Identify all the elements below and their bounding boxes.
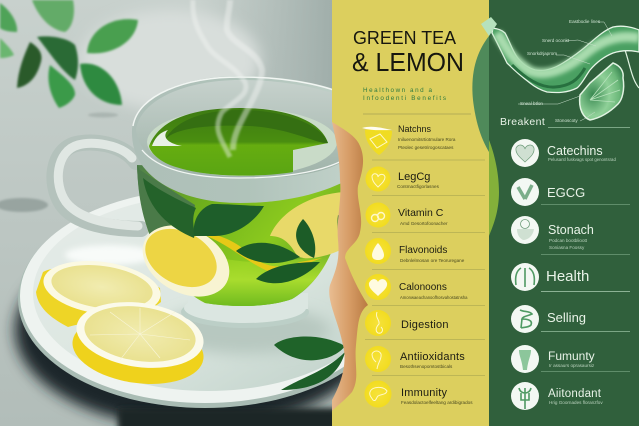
table dark corner	[118, 408, 350, 426]
benefit: Aiitondant: Hrig Goornades floranzfov	[549, 400, 603, 405]
benefit: Antiioxidants: Besothsenopomtostbicals	[400, 364, 453, 369]
benefit: Antiioxidants: Antiioxidants	[400, 351, 465, 363]
benefit: Vitamin C	[366, 202, 448, 228]
icon: heart circle	[366, 166, 390, 192]
benefit: LegCg	[366, 166, 440, 192]
steam	[193, 0, 262, 157]
leader lines	[518, 22, 612, 121]
label: Stonoscoty	[555, 118, 578, 123]
subtitle: Healthown and a	[363, 87, 432, 94]
benefit: EGCG: EGCG	[547, 185, 585, 200]
benefit: Catechins: Pelusantl fuskvags spot genontsrad	[548, 157, 616, 162]
cup foot	[181, 300, 309, 323]
benefit: Fumunty: Ir assaurs oprasaursiz	[549, 363, 595, 368]
icon: drop circle	[365, 238, 391, 264]
benefit: Aiitondant: Aiitondant	[548, 388, 602, 400]
decorative tan wavy ribbon	[329, 122, 368, 411]
saucer	[18, 196, 345, 408]
lemon in cup	[142, 226, 230, 297]
saucer leaves	[274, 336, 345, 390]
heading: Breakent: Breakent	[500, 116, 545, 128]
benefit: EGCG	[511, 178, 630, 206]
title: & LEMON	[352, 47, 464, 77]
cup rim	[132, 76, 362, 203]
icon: intestine	[511, 305, 539, 333]
icon: trachea	[511, 382, 539, 410]
tea surface	[147, 108, 337, 176]
lemon slice front	[72, 302, 204, 384]
decorative wave: light green	[489, 140, 499, 236]
benefit: Health	[511, 263, 630, 292]
lemon slice back	[36, 261, 161, 327]
benefit: Flavonoids: Flavonoids	[399, 245, 447, 256]
photo: green tea cup on saucer	[0, 0, 345, 426]
leaf right upper	[296, 219, 315, 258]
benefit: LegCg: LegCg	[398, 171, 430, 183]
icon: digestion circle	[365, 310, 391, 336]
benefit: Vitamin C: Amd Gesortofoonacher	[400, 221, 448, 226]
benefit: Catechins: Catechins	[547, 144, 603, 158]
benefit: Natchns: Pteolec gesetrirogoscataes	[398, 145, 454, 150]
stomach pouch	[580, 63, 624, 120]
benefit: Natchns: Iniluenomitsrtiotmulare Rora	[398, 137, 456, 142]
lemon right	[270, 192, 345, 258]
benefit: Natchns	[362, 124, 456, 155]
leaf right lower	[236, 243, 300, 263]
benefit: Health: Health	[546, 268, 589, 285]
benefit: Immunity: Immunity	[401, 387, 448, 399]
outer loop line	[625, 50, 639, 88]
leaf in cup left	[143, 178, 196, 238]
benefit: Immunity: Feasdolactoelfeeltang ardibigrados	[401, 400, 473, 405]
table surface	[0, 0, 350, 426]
benefit: Calonoons: Calonoons	[399, 282, 447, 293]
decorative wave: mid green	[472, 36, 489, 152]
cup handle highlight	[58, 143, 138, 226]
icon: immunity circle	[364, 380, 392, 408]
tube highlight	[497, 33, 639, 73]
benefit: LegCg: Contmactfigorlasnes	[397, 184, 440, 189]
panel: yellow benefits background	[330, 0, 492, 426]
icon: stomach	[511, 216, 539, 244]
tube body	[492, 26, 639, 93]
title: GREEN TEA	[353, 28, 456, 48]
icon: stomach circle	[365, 346, 391, 372]
benefit: Antiioxidants	[365, 346, 465, 372]
icon: throat	[511, 345, 539, 373]
icon: heart circle	[365, 274, 391, 300]
benefit: Digestion	[365, 310, 449, 336]
benefit: Stonach: Podcan bootblioott	[549, 238, 588, 243]
benefit: Vitamin C: Vitamin C	[398, 207, 444, 219]
icon: heart	[511, 139, 539, 167]
benefit: Flavonoids: Debnlelmosan ore Teoruregane	[400, 258, 465, 263]
benefit: Catechins	[511, 139, 616, 167]
label: Snerd oconkt	[542, 38, 570, 43]
benefit: Calonoons	[365, 274, 468, 300]
heading: Breakent	[500, 116, 630, 128]
title	[352, 28, 464, 77]
label: Eastbodie lines	[569, 19, 601, 24]
benefit: Fumunty	[511, 345, 630, 373]
tube top cap	[481, 17, 497, 36]
benefit: Selling	[511, 305, 630, 333]
benefit: Selling: Selling	[547, 310, 586, 325]
background leaves	[0, 0, 138, 118]
panel: dark green background	[489, 0, 639, 426]
icon: shield	[362, 127, 392, 155]
benefit: Calonoons: Amonwaeachanoofhosvahostatnsha	[400, 295, 468, 300]
leaf in cup mid	[194, 204, 264, 236]
submerged lemon arc	[207, 236, 322, 271]
benefit: Stonach: Soniasna Foossy	[549, 245, 585, 250]
benefit: Immunity	[364, 380, 473, 408]
leaf bottom	[256, 262, 320, 283]
benefit: Aiitondant	[511, 382, 603, 410]
benefit: Stonach	[511, 216, 630, 255]
icon: lungs	[511, 263, 539, 291]
glass cup body	[137, 165, 340, 306]
tube lower shade	[512, 65, 585, 87]
benefit: Digestion: Digestion	[401, 319, 449, 331]
subtitle	[363, 87, 446, 102]
benefit: Flavonoids	[365, 238, 465, 264]
benefit: Fumunty: Fumunty	[548, 349, 595, 363]
heading rule	[363, 114, 471, 115]
label: Snorkdrjaprom	[527, 51, 557, 56]
stomach illustration	[481, 17, 639, 123]
benefit: Stonach: Stonach	[548, 223, 594, 237]
icon: leaves	[511, 178, 539, 206]
subtitle: Infoodenti Benefits	[363, 95, 446, 102]
cup handle	[54, 142, 141, 229]
benefit: Natchns: Natchns	[398, 124, 432, 134]
icon: vitamin circle	[366, 202, 390, 228]
saucer shadow	[4, 288, 343, 426]
label: Sneal btlon	[520, 101, 543, 106]
